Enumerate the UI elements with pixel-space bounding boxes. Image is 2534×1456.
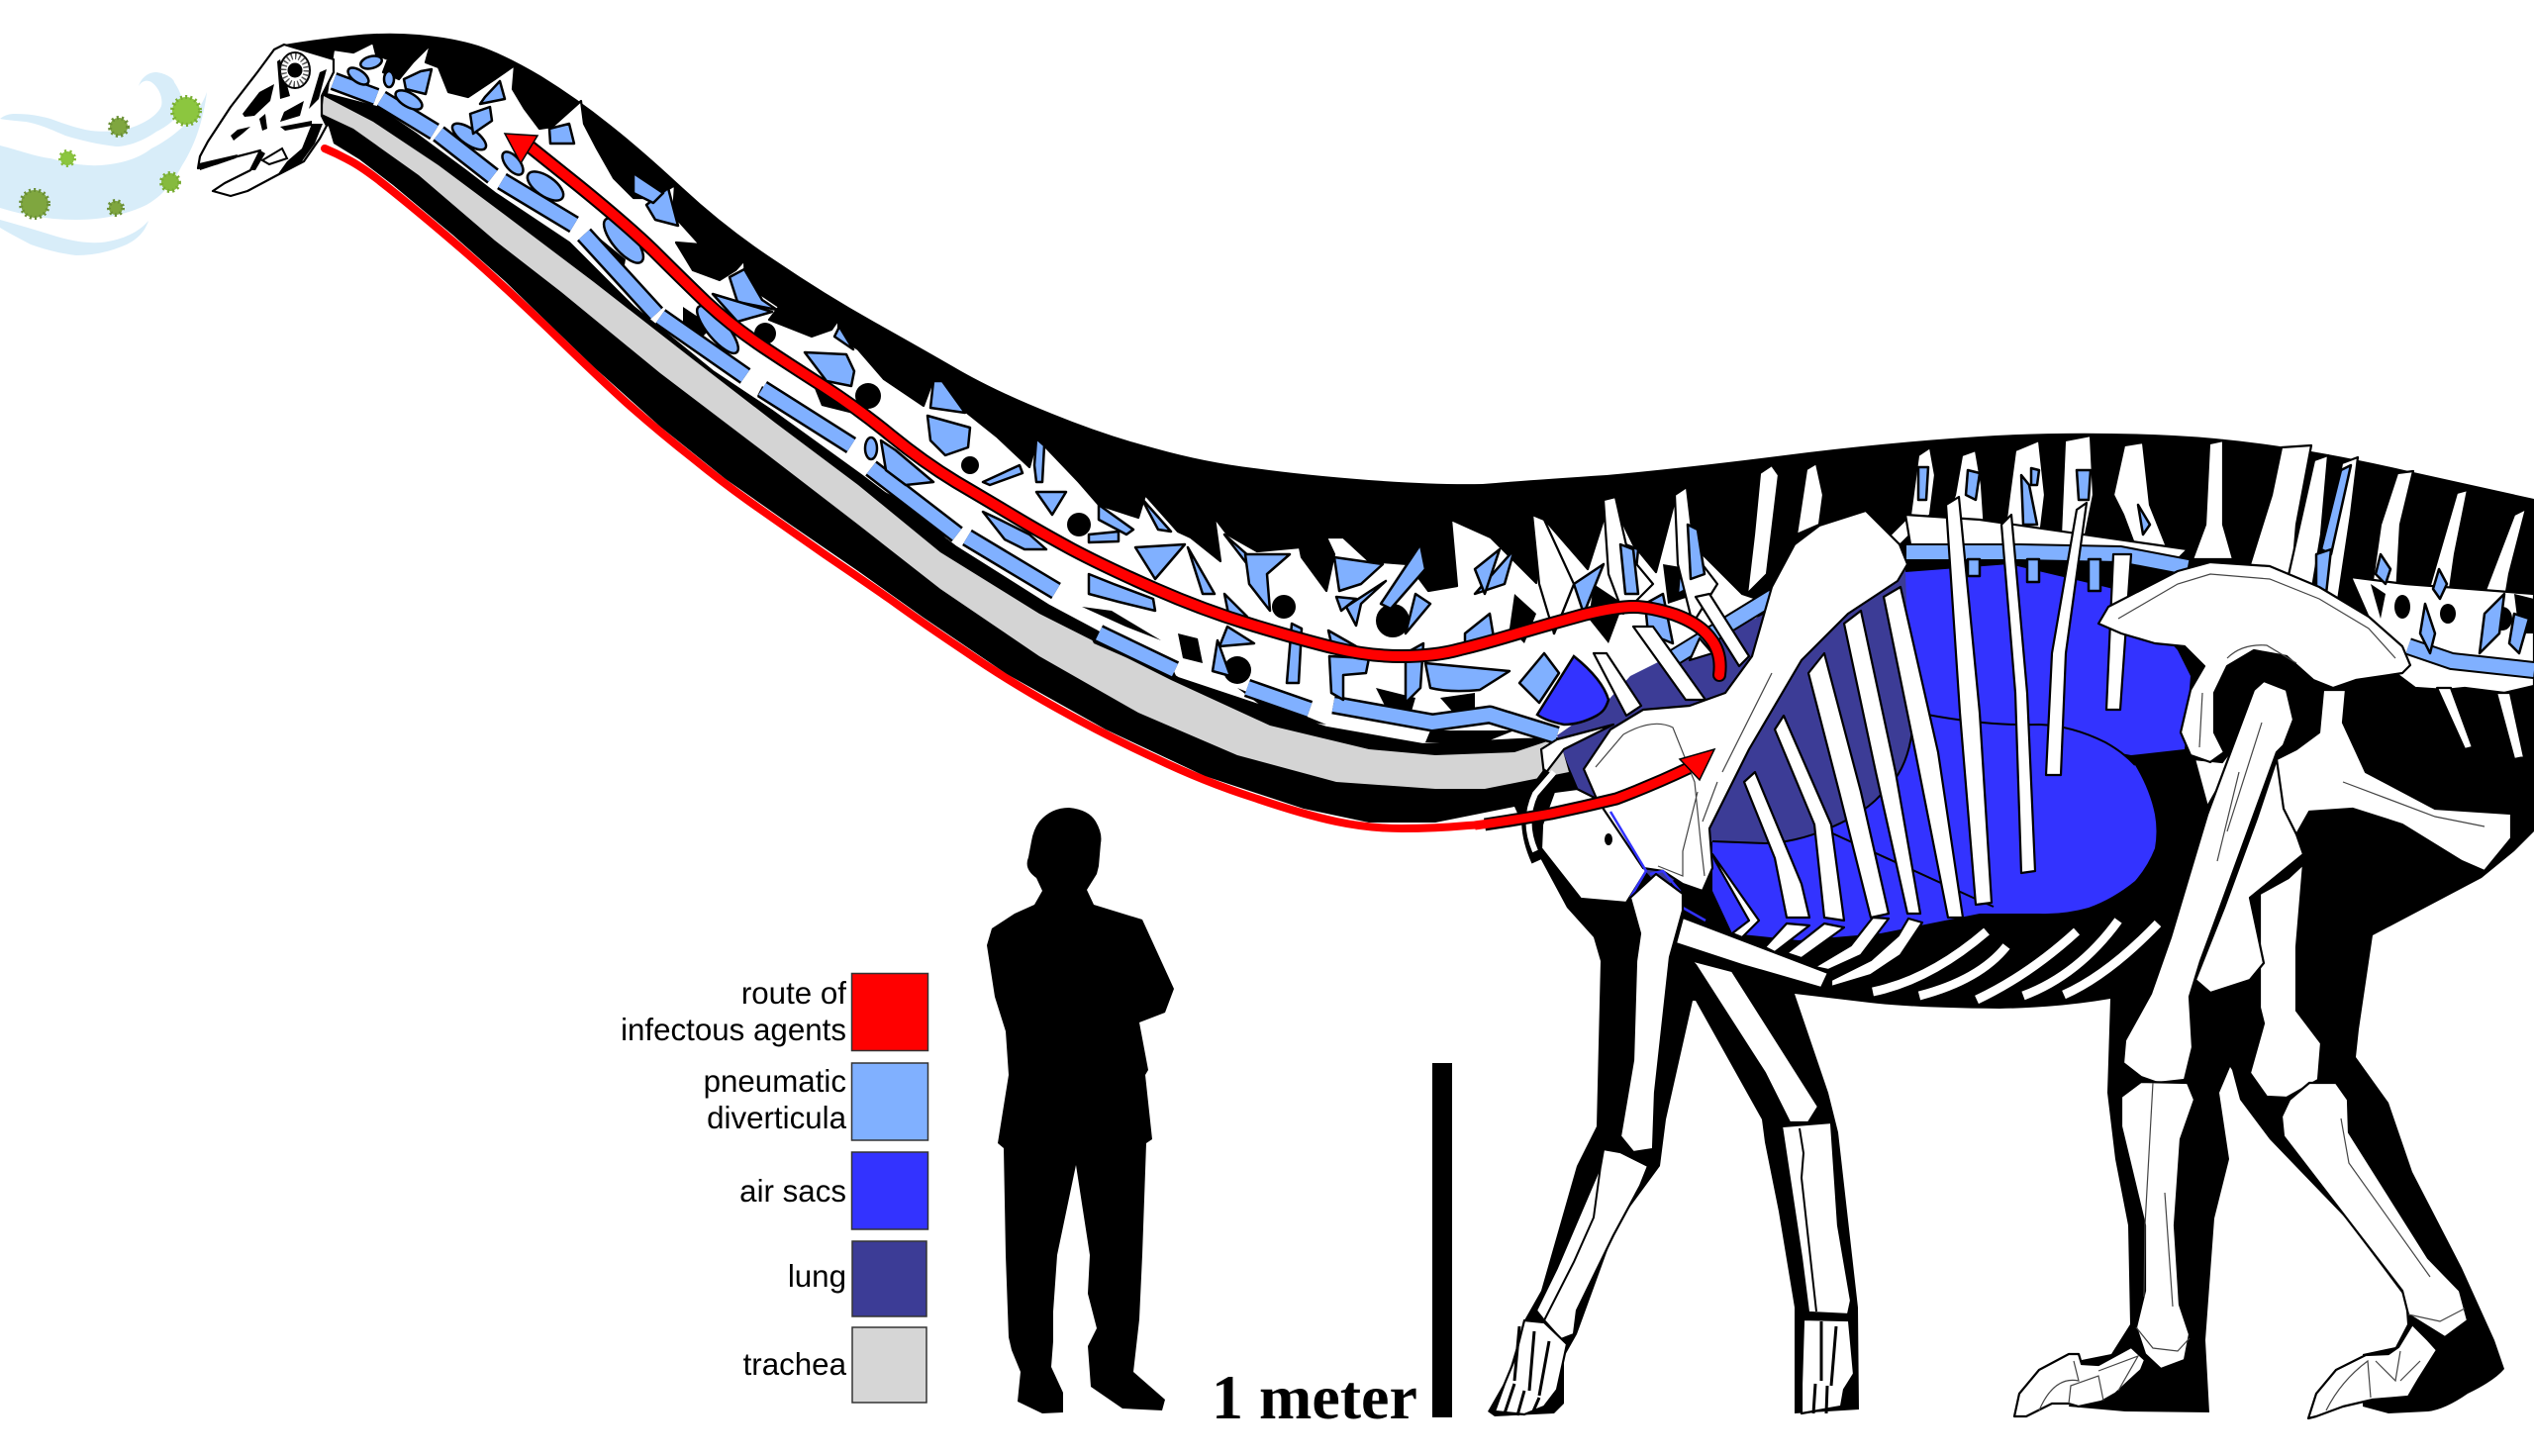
chest crescent highlight	[1528, 772, 1554, 851]
ribs	[1712, 497, 2131, 987]
scale line	[1432, 1063, 1452, 1417]
legend item: trachea	[743, 1327, 926, 1403]
air sacs	[1537, 564, 2191, 940]
front limbs	[1495, 874, 1854, 1415]
spur over trachea	[1541, 725, 1613, 775]
legend item: air sacs: air sacs	[739, 1174, 846, 1209]
ilium	[2098, 562, 2410, 762]
neck vertebrae	[327, 43, 1772, 744]
chevrons	[2437, 688, 2524, 759]
exhaled air with infectious agents	[0, 72, 207, 255]
coracoid foramen	[1605, 833, 1612, 845]
rear limbs and pelvis	[2014, 562, 2511, 1418]
dorsal and tail spines	[1532, 436, 2534, 693]
skull	[198, 45, 334, 196]
toe separations	[1505, 1321, 1836, 1415]
legend item: air sacs	[739, 1152, 928, 1229]
pectoral girdle	[1527, 511, 1907, 988]
posterior thoracic air sac	[1905, 564, 2191, 755]
skull openings	[231, 59, 327, 175]
eye ring	[280, 52, 310, 88]
lung and air sac boundary lines	[1712, 715, 2135, 907]
trachea	[322, 96, 1569, 789]
near radius and ulna	[1536, 1149, 1648, 1339]
near humerus	[1620, 874, 1683, 1152]
lung	[1557, 569, 1913, 891]
tail vertebrae	[2351, 577, 2534, 693]
near tibia	[2121, 1082, 2194, 1369]
tail vertebra gaps	[2371, 584, 2534, 633]
near femur	[2123, 681, 2293, 1083]
cervical ribs	[1594, 594, 1749, 716]
legend item: trachea: trachea	[743, 1347, 847, 1382]
legend item: pneumatic diverticula: pneumatic	[704, 1064, 846, 1099]
gaps between vertebrae	[396, 91, 1698, 742]
scale label: 1 meter	[1212, 1362, 1417, 1432]
red route along the ventral neck	[325, 148, 1485, 828]
air swoosh	[0, 72, 207, 255]
tooth row	[199, 154, 238, 170]
legend item: route of infectious agents	[621, 974, 928, 1051]
scale bar	[1212, 1063, 1452, 1432]
pneumatic diverticula rails	[334, 81, 1557, 735]
ischium	[2277, 690, 2511, 871]
dorsal vertebra bases	[1905, 515, 2188, 559]
pneumatic diverticula pockets	[345, 53, 1698, 703]
legend item: pneumatic diverticula: diverticula	[707, 1101, 847, 1135]
vertebral bone mass	[327, 43, 1772, 744]
rear limb detail	[2039, 1083, 2465, 1410]
skull bone	[198, 45, 334, 196]
far radius and ulna	[1782, 1122, 1851, 1314]
far femur	[2250, 864, 2321, 1098]
virus particles	[21, 97, 200, 218]
pelvis detail lines	[2118, 574, 2485, 861]
rear foot near	[2014, 1347, 2145, 1416]
rib cartilages	[1765, 923, 1809, 952]
spine diverticula	[1620, 465, 2529, 653]
chest crescent	[1527, 772, 1549, 861]
sternal plate bone	[1676, 918, 1828, 988]
far manus	[1802, 1319, 1854, 1413]
front limb detail	[1544, 1128, 1816, 1320]
cervical air sac	[1537, 656, 1608, 725]
rear-most pelvic bone	[2194, 745, 2237, 807]
far humerus	[1691, 960, 1818, 1122]
rear foot far	[2308, 1324, 2437, 1418]
legend item: pneumatic diverticula	[704, 1063, 928, 1140]
red route: ventral arrow over the shoulder	[1475, 749, 1714, 825]
legend item: route of infectious agents: infectous agents	[621, 1013, 846, 1047]
near manus	[1495, 1320, 1567, 1414]
coracoid	[1541, 789, 1646, 903]
legend item: route of infectious agents: route of	[741, 976, 846, 1011]
scapula detail	[1596, 673, 1772, 876]
abdominal air sac	[1712, 715, 2156, 940]
human silhouette for scale	[987, 808, 1174, 1413]
legend item: lung: lung	[788, 1259, 846, 1294]
legend item: lung	[788, 1241, 926, 1316]
gastralia	[1873, 921, 2158, 1000]
far tibia	[2282, 1083, 2468, 1337]
legend	[621, 974, 928, 1403]
red route: dorsal arrow up the neck	[505, 134, 1720, 675]
scapula	[1584, 511, 1907, 891]
pubis	[2195, 759, 2303, 993]
blue boundary lines	[1610, 812, 1706, 930]
back vertebral diverticula	[1673, 552, 2534, 670]
